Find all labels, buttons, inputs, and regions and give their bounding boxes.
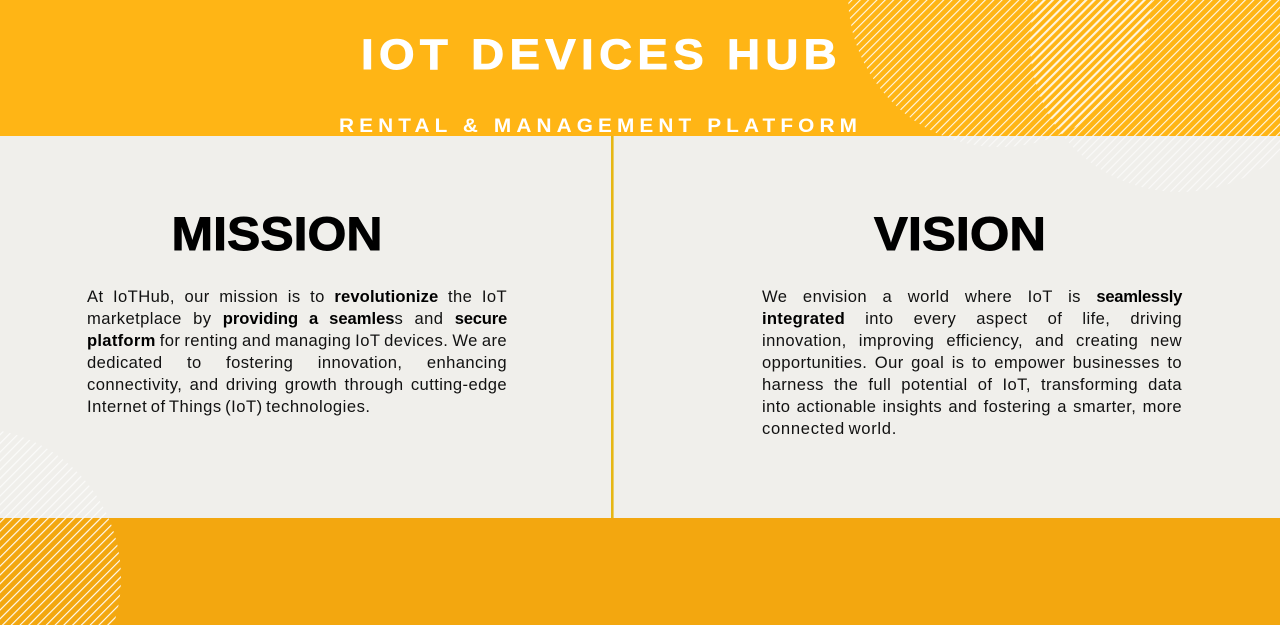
text block: vision: into actionable insights and fostering a smarter, more	[762, 397, 1182, 416]
text block: vision: We envision a world where IoT is seamlessly	[762, 287, 1182, 306]
text block: mission: connectivity, and driving growth through cutting-edge	[87, 375, 507, 394]
decorative hatched circle: bottom left	[0, 431, 121, 625]
text block: mission: platform for renting and managing IoT devices. We are	[87, 331, 507, 350]
text block: vision: harness the full potential of IoT, transforming data	[762, 375, 1182, 394]
text block: mission: Internet of Things (IoT) technologies.	[87, 397, 370, 416]
subtitle: RENTAL & MANAGEMENT PLATFORM	[339, 115, 862, 137]
column divider	[611, 136, 614, 518]
text block: vision: innovation, improving efficiency, and creating new	[762, 331, 1182, 350]
text block: mission: At IoTHub, our mission is to revolutionize the IoT	[87, 287, 507, 306]
text block: vision	[762, 287, 1182, 438]
text block: mission: marketplace by providing a seamless and secure	[87, 309, 507, 328]
heading: mission: MISSION	[172, 207, 382, 260]
footer band	[0, 518, 1280, 625]
text block: vision: connected world.	[762, 419, 897, 438]
heading: vision: VISION	[874, 207, 1046, 260]
text block: mission	[87, 287, 507, 416]
header band	[0, 0, 1280, 136]
text block: vision: integrated into every aspect of life, driving	[762, 309, 1182, 328]
text block: mission: dedicated to fostering innovation, enhancing	[87, 353, 507, 372]
decorative hatched circles: top right	[848, 0, 1280, 192]
text block: vision: opportunities. Our goal is to empower businesses to	[762, 353, 1182, 372]
title: IOT DEVICES HUB	[361, 31, 842, 79]
